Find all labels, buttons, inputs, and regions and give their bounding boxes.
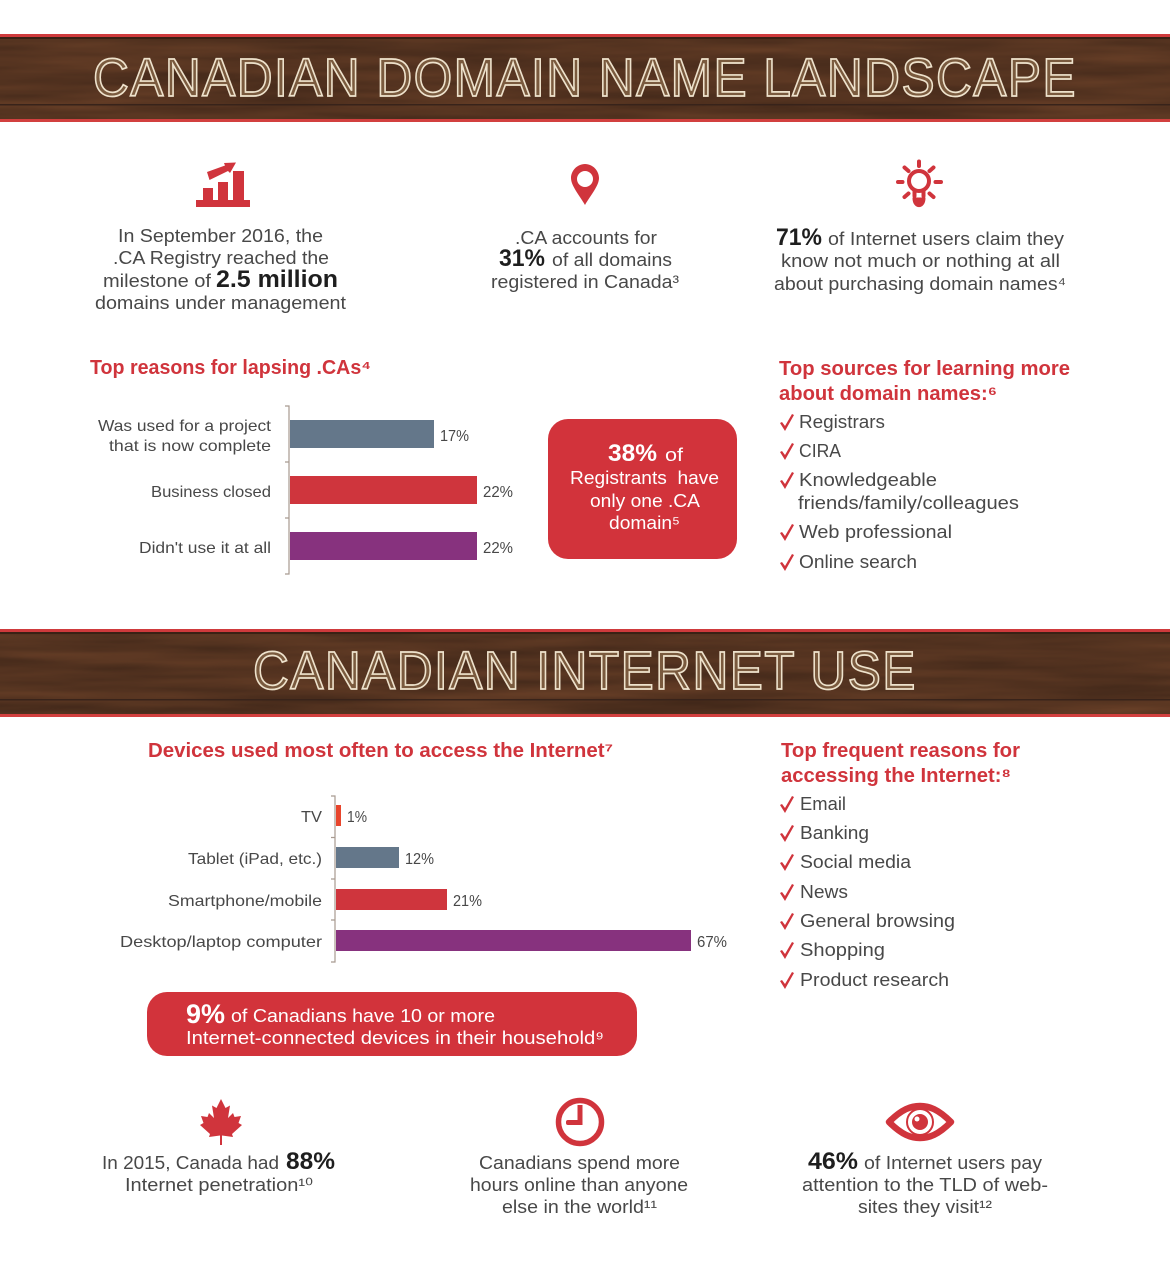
bar chart: devices: Tablet (iPad, etc.) xyxy=(188,851,322,868)
list: top frequent reasons: Product research xyxy=(800,970,949,990)
stat: 71% know not much: know not much or nothing at all xyxy=(781,251,1060,271)
bar chart: devices: 1% xyxy=(347,809,367,826)
bar chart: devices: TV xyxy=(301,809,322,826)
list: top sources for learning: Online search xyxy=(799,552,917,572)
list: top sources for learning xyxy=(779,358,1070,572)
bar chart: devices: 67% xyxy=(697,934,727,951)
bar chart: devices: 12% xyxy=(405,851,434,868)
bar chart: devices: Smartphone/mobile xyxy=(168,893,322,910)
stat: 88% internet penetration: 88% xyxy=(286,1148,335,1175)
stat: 46% pay attention to TLD: of Internet users pay xyxy=(864,1153,1042,1173)
banner: Canadian Internet Use xyxy=(0,629,1170,717)
heading: top reasons for lapsing: Top reasons for lapsing .CAs⁴ xyxy=(90,357,371,379)
bar chart: lapsing reasons: Didn't use it at all xyxy=(139,540,271,557)
stat: 31% of domains: of all domains xyxy=(552,250,672,270)
callout: 9% of Canadians xyxy=(147,992,637,1056)
list: top frequent reasons: accessing the Internet:⁸ xyxy=(781,765,1011,787)
callout: 38% of registrants: 38% xyxy=(608,440,657,467)
stat: 71% know not much: of Internet users claim they xyxy=(828,229,1064,249)
stat: 88% internet penetration: Internet penetration¹⁰ xyxy=(125,1175,313,1195)
callout: 9% of Canadians: 9% xyxy=(186,999,225,1029)
stat: 31% of domains: .CA accounts for xyxy=(515,228,657,248)
callout: 38% of registrants: of xyxy=(665,445,684,465)
stat: hours online: Canadians spend more xyxy=(479,1153,680,1173)
stat: 2.5 million domains: .CA Registry reached the xyxy=(113,248,329,268)
icon: eye xyxy=(889,1106,951,1138)
stat: 71% know not much: 71% xyxy=(776,224,822,251)
stat: 2.5 million domains: In September 2016, the xyxy=(118,226,323,246)
stat: 88% internet penetration xyxy=(102,1148,335,1195)
banner: Canadian Domain Name Landscape: CANADIAN DOMAIN NAME LANDSCAPE xyxy=(93,47,1076,107)
stat: 2.5 million domains: 2.5 million xyxy=(216,266,338,293)
stat: 31% of domains xyxy=(491,228,679,292)
banner: Canadian Domain Name Landscape xyxy=(0,34,1170,122)
list: top frequent reasons: Social media xyxy=(800,852,912,872)
callout: 38% of registrants xyxy=(548,419,737,559)
stat: 46% pay attention to TLD: 46% xyxy=(808,1148,858,1175)
list: top sources for learning: Registrars xyxy=(799,412,885,432)
bar chart: lapsing reasons xyxy=(98,406,513,574)
bar chart: lapsing reasons: Business closed xyxy=(151,484,271,501)
bar chart: lapsing reasons: Was used for a project xyxy=(98,418,272,435)
bar chart: lapsing reasons: 22% xyxy=(483,540,513,557)
callout: 38% of registrants: domain⁵ xyxy=(609,513,680,533)
stat: hours online xyxy=(470,1153,688,1217)
list: top sources for learning: CIRA xyxy=(799,441,841,461)
stat: hours online: hours online than anyone xyxy=(470,1175,688,1195)
callout: 9% of Canadians: Internet-connected devices in their household⁹ xyxy=(186,1028,604,1048)
icon: clock xyxy=(558,1100,602,1144)
heading: devices used: Devices used most often to access the Internet⁷ xyxy=(148,740,613,762)
bar chart: lapsing reasons: 22% xyxy=(483,484,513,501)
bar chart: lapsing reasons: that is now complete xyxy=(109,438,271,455)
stat: 46% pay attention to TLD xyxy=(802,1148,1048,1217)
stat: 46% pay attention to TLD: sites they visit¹² xyxy=(858,1197,992,1217)
stat: 88% internet penetration: In 2015, Canada had xyxy=(102,1153,279,1173)
list: top sources for learning: Knowledgeable xyxy=(799,470,937,490)
list: top frequent reasons xyxy=(780,740,1020,990)
stat: 31% of domains: registered in Canada³ xyxy=(491,272,679,292)
bar chart: devices: 21% xyxy=(453,893,482,910)
list: top frequent reasons: Banking xyxy=(800,823,869,843)
bar chart: lapsing reasons: 17% xyxy=(440,428,469,445)
bar chart: devices: Desktop/laptop computer xyxy=(120,934,323,951)
callout: 38% of registrants: Registrants have xyxy=(570,468,719,488)
banner: Canadian Internet Use: CANADIAN INTERNET USE xyxy=(253,640,915,700)
stat: 2.5 million domains: milestone of xyxy=(103,271,212,291)
icon: light bulb xyxy=(898,162,941,207)
stat: 2.5 million domains xyxy=(95,226,346,313)
callout: 9% of Canadians: of Canadians have 10 or more xyxy=(231,1006,495,1026)
stat: hours online: else in the world¹¹ xyxy=(502,1197,657,1217)
list: top frequent reasons: Top frequent reasons for xyxy=(781,740,1020,762)
list: top sources for learning: Web professional xyxy=(799,522,952,542)
list: top sources for learning: about domain names:⁶ xyxy=(779,383,997,405)
stat: 31% of domains: 31% xyxy=(499,245,545,272)
list: top frequent reasons: General browsing xyxy=(800,911,955,931)
icon: rising bar chart xyxy=(196,162,250,207)
stat: 71% know not much xyxy=(774,224,1066,294)
icon: map pin xyxy=(571,164,599,205)
list: top frequent reasons: Email xyxy=(800,794,846,814)
icon: maple leaf xyxy=(200,1099,242,1145)
stat: 46% pay attention to TLD: attention to the TLD of web- xyxy=(802,1175,1048,1195)
bar chart: devices xyxy=(120,796,727,962)
list: top sources for learning: Top sources for learning more xyxy=(779,358,1070,380)
list: top frequent reasons: Shopping xyxy=(800,940,885,960)
list: top frequent reasons: News xyxy=(800,882,848,902)
callout: 38% of registrants: only one .CA xyxy=(590,491,700,511)
stat: 71% know not much: about purchasing domain names⁴ xyxy=(774,274,1066,294)
stat: 2.5 million domains: domains under management xyxy=(95,293,346,313)
list: top sources for learning: friends/family/colleagues xyxy=(798,493,1019,513)
